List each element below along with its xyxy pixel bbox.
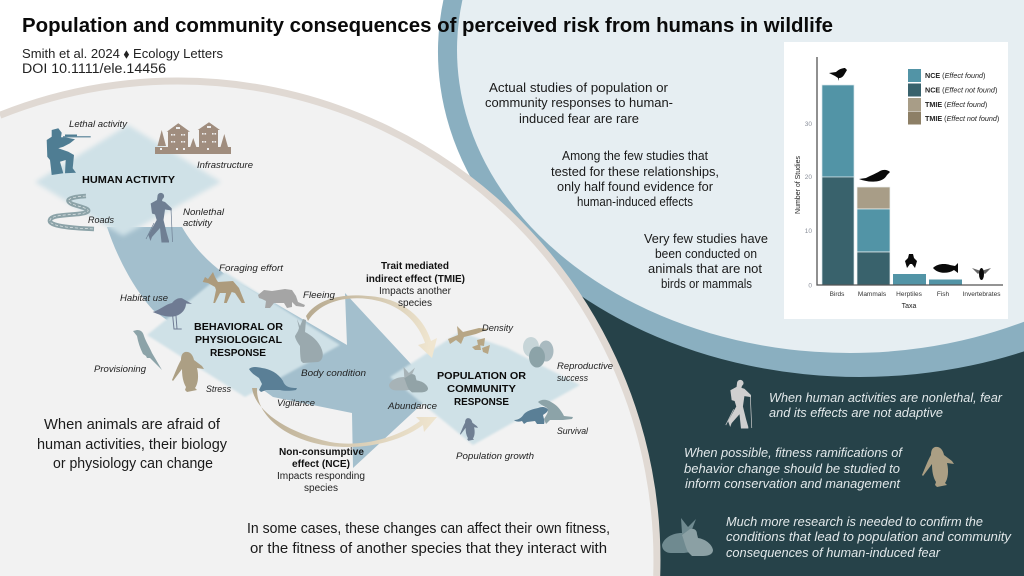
chart axes [817, 57, 1003, 285]
text block: few studies on other taxa: birds or mammals [661, 276, 752, 291]
callout: non-consumptive effect: effect (NCE) [292, 459, 350, 470]
behavioral response zone [147, 272, 340, 397]
text block: half found evidence: human-induced effects [577, 194, 693, 209]
panel: dark conclusions background [540, 290, 1024, 576]
diagram labels: Foraging effort [219, 263, 283, 274]
icon: cougar [258, 289, 305, 308]
bars: fish [929, 280, 962, 285]
text block: nonlethal not adaptive: When human activities are nonlethal, fear [769, 391, 1003, 405]
callout: trait mediated indirect effect: Trait mediated [381, 261, 449, 272]
text block: half found evidence [551, 148, 719, 209]
callout: non-consumptive effect: Impacts responding [277, 471, 365, 482]
icon: survival marmots [514, 400, 573, 424]
text block: fitness ramifications [684, 446, 904, 491]
arrow: trait mediated effect [306, 295, 437, 358]
legend: NCE (Effect not found) [925, 86, 997, 94]
icon: rabbit [295, 319, 323, 363]
text block: fitness consequences [247, 521, 610, 557]
x axis labels: Mammals [858, 291, 887, 298]
callout: trait mediated indirect effect [366, 261, 465, 309]
icon: plover [153, 298, 192, 329]
diagram labels: Reproductive [557, 361, 613, 372]
text block: fitness ramifications: When possible, fitness ramifications of [684, 446, 904, 460]
arrow: non-consumptive effect [252, 388, 437, 447]
y axis ticks: 20 [805, 174, 812, 181]
callout: trait mediated indirect effect: Impacts another [379, 286, 452, 297]
x axis title: Taxa [902, 303, 916, 310]
citation: Smith et al. 2024 ⬧ Ecology Letters [22, 46, 224, 61]
text block: half found evidence: Among the few studies that [562, 148, 708, 163]
population response zone [390, 332, 580, 445]
diagram labels: Abundance [387, 401, 437, 412]
callout: non-consumptive effect [277, 447, 365, 494]
callout: non-consumptive effect: species [304, 483, 338, 494]
diagram labels: Fleeing [303, 290, 336, 301]
diagram labels: HUMAN ACTIVITY [82, 174, 175, 186]
callout: non-consumptive effect: Non-consumptive [279, 447, 364, 458]
x axis labels: Fish [937, 291, 950, 298]
arrow: flow from human activity to population response [107, 227, 436, 468]
text block: few studies on other taxa [644, 231, 768, 291]
legend: NCE (Effect found) [925, 71, 985, 80]
icon: chart fly [972, 268, 991, 280]
icon: provisioning bird [133, 330, 162, 370]
diagram labels: PHYSIOLOGICAL [195, 334, 283, 346]
diagram labels: BEHAVIORAL OR [194, 321, 283, 333]
text block: studies are rare [485, 80, 673, 126]
bars: mammals [857, 187, 890, 285]
panel: findings circle [457, 0, 1024, 353]
text block: few studies on other taxa: been conducted on [655, 246, 757, 261]
icon: rabbits abundance [389, 367, 428, 392]
diagram labels: Density [482, 323, 514, 334]
text block: nonlethal not adaptive [769, 391, 1003, 420]
diagram labels: Lethal activity [69, 119, 128, 130]
panel: conceptual diagram circle [0, 81, 657, 576]
text block: nonlethal not adaptive: and its effects are not adaptive [769, 406, 943, 420]
text block: half found evidence: only half found evidence for [557, 179, 714, 194]
icon: marmot [249, 367, 297, 392]
text block: fitness consequences: or the fitness of another species that they interact with [250, 541, 607, 557]
diagram labels: Body condition [301, 368, 366, 379]
icon: penguin population [460, 418, 478, 441]
text block: studies are rare: induced fear are rare [519, 111, 639, 126]
x axis labels [830, 291, 1001, 298]
icon: hiker [146, 193, 172, 242]
x axis labels: Herptiles [896, 291, 923, 298]
citation: DOI 10.1111/ele.14456 [22, 61, 166, 76]
icon: hunter [47, 128, 91, 175]
text block: studies are rare: Actual studies of population or [489, 80, 669, 95]
title: Population and community consequences of perceived risk from humans in wildlife [22, 15, 833, 37]
x axis labels: Birds [830, 291, 845, 298]
text block: animals afraid: or physiology can change [53, 456, 213, 472]
text block: half found evidence: tested for these relationships, [551, 164, 719, 179]
legend: TMIE (Effect found) [925, 100, 987, 109]
icon: rabbits on dark panel [662, 518, 713, 556]
icon: moose [203, 272, 245, 303]
diagram labels: Nonlethal [183, 207, 225, 218]
icon: chart bird [829, 68, 847, 81]
icon: chart frog [905, 254, 917, 268]
y axis ticks: 10 [805, 228, 812, 235]
legend: TMIE (Effect not found) [925, 114, 999, 123]
text block: animals afraid [37, 417, 228, 472]
y axis ticks: 30 [805, 121, 812, 128]
text block: animals afraid: human activities, their biology [37, 437, 228, 453]
icon: chart seal [859, 170, 890, 182]
text block: studies are rare: community responses to human- [485, 95, 673, 110]
text block: fitness consequences: In some cases, these changes can affect their own fitness, [247, 521, 610, 537]
bars: herptiles [893, 274, 926, 285]
diagram labels: success [557, 373, 588, 384]
panel: blue ring of findings circle [438, 0, 1024, 377]
icon: infrastructure houses [155, 122, 231, 154]
text block: animals afraid: When animals are afraid of [44, 417, 221, 433]
text block: more research needed: conditions that lead to population and community [726, 530, 1012, 544]
diagram labels: Infrastructure [197, 160, 253, 171]
human activity zone [35, 125, 221, 236]
x axis labels: Invertebrates [963, 291, 1001, 298]
diagram labels: POPULATION OR [437, 370, 526, 382]
y axis ticks: 0 [808, 282, 812, 290]
diagram labels: Habitat use [120, 293, 168, 304]
callout: trait mediated indirect effect: indirect effect (TMIE) [366, 274, 465, 285]
diagram labels: RESPONSE [210, 347, 266, 359]
diagram labels: activity [183, 218, 213, 229]
text block: fitness ramifications: inform conservation and management [685, 477, 901, 491]
icon: road [50, 196, 94, 229]
diagram labels: RESPONSE [454, 396, 509, 408]
diagram labels: Provisioning [94, 364, 147, 375]
text block: more research needed [726, 515, 1012, 560]
icon: eggs [523, 337, 554, 368]
icon: leaves density [448, 326, 490, 354]
text block: few studies on other taxa: animals that are not [648, 261, 762, 276]
text block: few studies on other taxa: Very few studies have [644, 231, 768, 246]
text block: more research needed: consequences of human-induced fear [726, 546, 941, 560]
diagram labels: Roads [88, 215, 114, 226]
icon: chart fish [933, 263, 958, 273]
panel: bar chart of studies by taxa [784, 42, 1008, 319]
icon: penguin tan [172, 352, 204, 392]
text block: more research needed: Much more research is needed to confirm the [726, 515, 983, 529]
icon: hiker on dark panel [726, 380, 752, 429]
diagram labels: Population growth [456, 451, 534, 462]
y axis title: Number of Studies [795, 156, 802, 214]
bars: birds [822, 85, 854, 285]
y axis ticks [805, 121, 812, 290]
diagram labels: COMMUNITY [447, 383, 516, 395]
diagram labels: Vigilance [277, 398, 315, 409]
legend [908, 69, 999, 124]
diagram labels: Stress [206, 384, 231, 395]
icon: penguin on dark panel [922, 447, 954, 487]
diagram labels [69, 119, 613, 462]
text block: fitness ramifications: behavior change should be studied to [684, 462, 900, 476]
diagram labels: Survival [557, 426, 589, 437]
citation [22, 46, 224, 76]
callout: trait mediated indirect effect: species [398, 298, 432, 309]
